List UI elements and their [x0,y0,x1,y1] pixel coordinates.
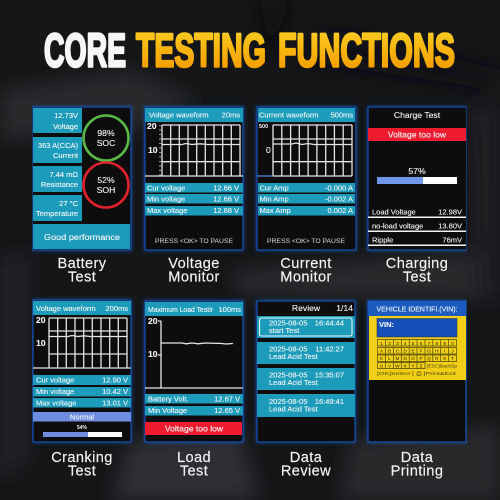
progress [377,166,457,184]
label: voltage monitor: Monitor [168,270,220,286]
header: VEHICLE IDENTIFI.(VIN): [376,304,458,314]
label: data printing: Printing [391,464,443,480]
resistance readout [33,166,82,192]
key grid: T [451,356,454,361]
alert [145,422,242,435]
key grid: Y [411,364,415,368]
status bar [33,224,130,249]
key grid: V [388,364,392,368]
load chart: 10 [148,349,158,359]
key grid: U [380,364,383,368]
readings: 0.002 A [328,206,353,215]
readings: 76mV [442,236,462,244]
panel: current monitor [257,107,356,250]
readings: 12.65 V [214,406,240,415]
label: data review: Review [281,464,331,480]
readings: Load Voltage [372,208,416,216]
readings: -0.002 A [325,194,353,204]
readings [145,394,243,416]
waveform chart: 500 [259,124,268,130]
record 3: 2025-08-05 [269,370,307,380]
record 1 [257,316,355,338]
key grid: N [404,356,407,361]
header [292,303,353,313]
header: Current waveform [259,110,319,120]
key grid: 1 [380,341,383,346]
label: data review: Data [290,450,323,466]
SOC gauge: 98% [97,128,115,138]
progress [43,425,122,437]
title: CORE [44,24,126,76]
waveform chart [257,124,352,176]
readings: 12.68 V [213,206,239,215]
readings [145,183,243,216]
key grid: 5 [412,341,415,346]
voltage readout [33,108,82,133]
label: cranking test: Cranking [51,450,113,466]
panel: battery test [32,107,131,250]
readings: 13.80V [438,222,462,230]
readings: Max Amp [260,206,291,215]
label: charging test: Charging [386,256,448,272]
panel: cranking test [33,300,131,442]
readings: Max voltage [36,398,76,408]
key grid: K [380,356,384,361]
key grid: 9 [443,341,446,346]
resistance readout: Resistance [41,180,78,189]
waveform chart: 20 [36,315,46,325]
key grid: B [388,348,391,354]
key grid: C [396,348,400,354]
alert: Voltage too low [165,424,224,434]
load chart: 20 [148,316,158,326]
label: charging test: Test [403,270,431,286]
record 2: 2025-08-05 [269,344,307,354]
key hints: [OK]Select [ ⎙ ]Print&Exit [377,371,457,377]
header [145,108,243,122]
waveform chart: 10 [36,338,46,348]
readings: Min Amp [260,194,289,204]
key grid: P [419,356,423,361]
key grid: L [388,356,391,361]
readings: Min voltage [147,194,185,204]
panel: voltage monitor [145,107,243,250]
panel: data printing [368,301,466,442]
key grid: E [411,348,415,354]
key grid: J [451,348,454,354]
readings [368,208,466,246]
header: Review [292,303,321,313]
panel: data review [257,301,355,442]
label: voltage monitor: Voltage [168,256,220,272]
header: 1/14 [336,303,353,313]
readings: Cur voltage [36,376,74,384]
heading: Charge Test [394,110,441,120]
label: battery test: Test [68,270,96,286]
record 4: Lead Acid Test [269,404,319,414]
key grid: X [404,364,407,368]
record 4: 2025-08-05 [269,397,307,406]
record 4: 16:49:41 [315,397,344,406]
header [33,301,131,315]
key grid: R [435,356,439,361]
readings: 12.90 V [102,376,128,384]
status bar [33,412,131,422]
readings: 12.66 V [213,184,239,192]
record 4 [257,394,355,417]
key grid: I [444,348,445,354]
panel: charging test [368,107,467,250]
waveform chart [145,121,243,176]
key grid: 7 [428,341,431,346]
readings: Cur voltage [147,184,185,192]
status bar: Good performance [44,232,120,242]
header [145,302,243,316]
key grid: W [395,364,400,368]
key grid: 3 [396,341,399,346]
readings: Ripple [372,236,393,244]
header: 20ms [222,110,240,120]
label: load test: Load [177,450,211,466]
readings: Battery Volt. [148,394,188,404]
progress: 54% [77,425,88,431]
voltage readout: Voltage [53,122,78,131]
temperature readout: Temperature [36,209,78,218]
key grid: Z [420,364,423,368]
record 1: 16:44:44 [315,318,344,328]
waveform chart: 20 [147,121,157,131]
key grid: O [411,356,415,361]
readings: 13.01 V [102,398,128,408]
readings: Min Voltage [148,406,187,415]
SOC gauge [84,116,128,160]
pause prompt: PRESS <OK> TO PAUSE [155,238,233,245]
key grid: S [443,356,446,361]
SOH gauge: 52% [97,175,115,185]
waveform chart: 10 [148,145,158,155]
header: Maximum Load Testir [148,305,213,314]
yellow keypad screen [369,316,466,380]
label: cranking test: Test [68,464,96,480]
record 3: Lead Acid Test [269,378,319,387]
label: battery test: Battery [57,256,107,272]
header: Voltage waveform [36,304,96,313]
key grid: 4 [404,341,407,346]
current readout [33,137,82,163]
readings: 12.66 V [213,194,239,204]
alert [368,128,466,141]
readings: 12.98V [438,208,462,216]
label: current monitor: Current [280,256,332,272]
key grid: 0 [451,341,454,346]
record 2 [257,342,355,364]
key grid: [ESC]BackSp [427,364,457,370]
title: TESTING [136,24,266,76]
key grid: M [395,356,399,361]
key grid: D [404,348,408,354]
key grid: Q [427,356,431,361]
record 3: 15:35:07 [315,370,344,380]
readings: 12.67 V [214,394,240,404]
header: 200ms [105,304,128,313]
current readout: Current [53,151,79,160]
status bar: Normal [70,412,94,422]
readings: Cur Amp [260,184,289,192]
key grid [378,340,457,370]
readings [258,183,355,216]
record 1: 2025-08-05 [269,318,307,328]
resistance readout: 7.44 mΩ [49,170,78,179]
label: load test: Test [180,464,208,480]
readings: Max voltage [147,206,187,215]
SOH gauge: SOH [97,185,115,195]
readings [33,375,131,408]
load chart [145,316,243,388]
header: 500ms [330,110,353,120]
key grid: G [427,348,431,354]
current readout: 363 A(CCA) [38,141,78,150]
alert: Voltage too low [388,130,447,140]
progress: 57% [408,166,426,176]
record 1: start Test [269,326,300,335]
SOC gauge: SOC [97,138,115,148]
readings: -0.000 A [325,184,353,192]
key grid: H [435,348,438,354]
key grid: 8 [436,341,439,346]
readings: 10.42 V [102,387,128,396]
VIN input: VIN: [379,320,394,329]
record 3 [257,368,355,390]
label: data printing: Data [401,450,434,466]
key grid: 6 [420,341,423,346]
key grid: F [420,348,423,354]
key grid: 2 [388,341,391,346]
panel: load test [145,301,243,442]
header: Voltage waveform [149,110,209,120]
header: 100ms [218,305,241,314]
voltage readout: 12.73V [54,111,78,120]
key grid: A [380,348,384,354]
pause prompt: PRESS <OK> TO PAUSE [267,238,345,245]
readings: Min voltage [36,387,74,396]
title [44,24,455,76]
readings: no-load voltage [372,222,423,230]
label: current monitor: Monitor [280,270,332,286]
temperature readout [33,195,82,221]
record 2: 11:42:27 [315,344,344,354]
header [258,108,355,122]
waveform chart: 0 [266,145,271,155]
header [368,301,466,316]
SOH gauge [84,162,128,208]
waveform chart [33,315,131,368]
temperature readout: 27 °C [59,199,79,208]
record 2: Lead Acid Test [269,352,319,361]
